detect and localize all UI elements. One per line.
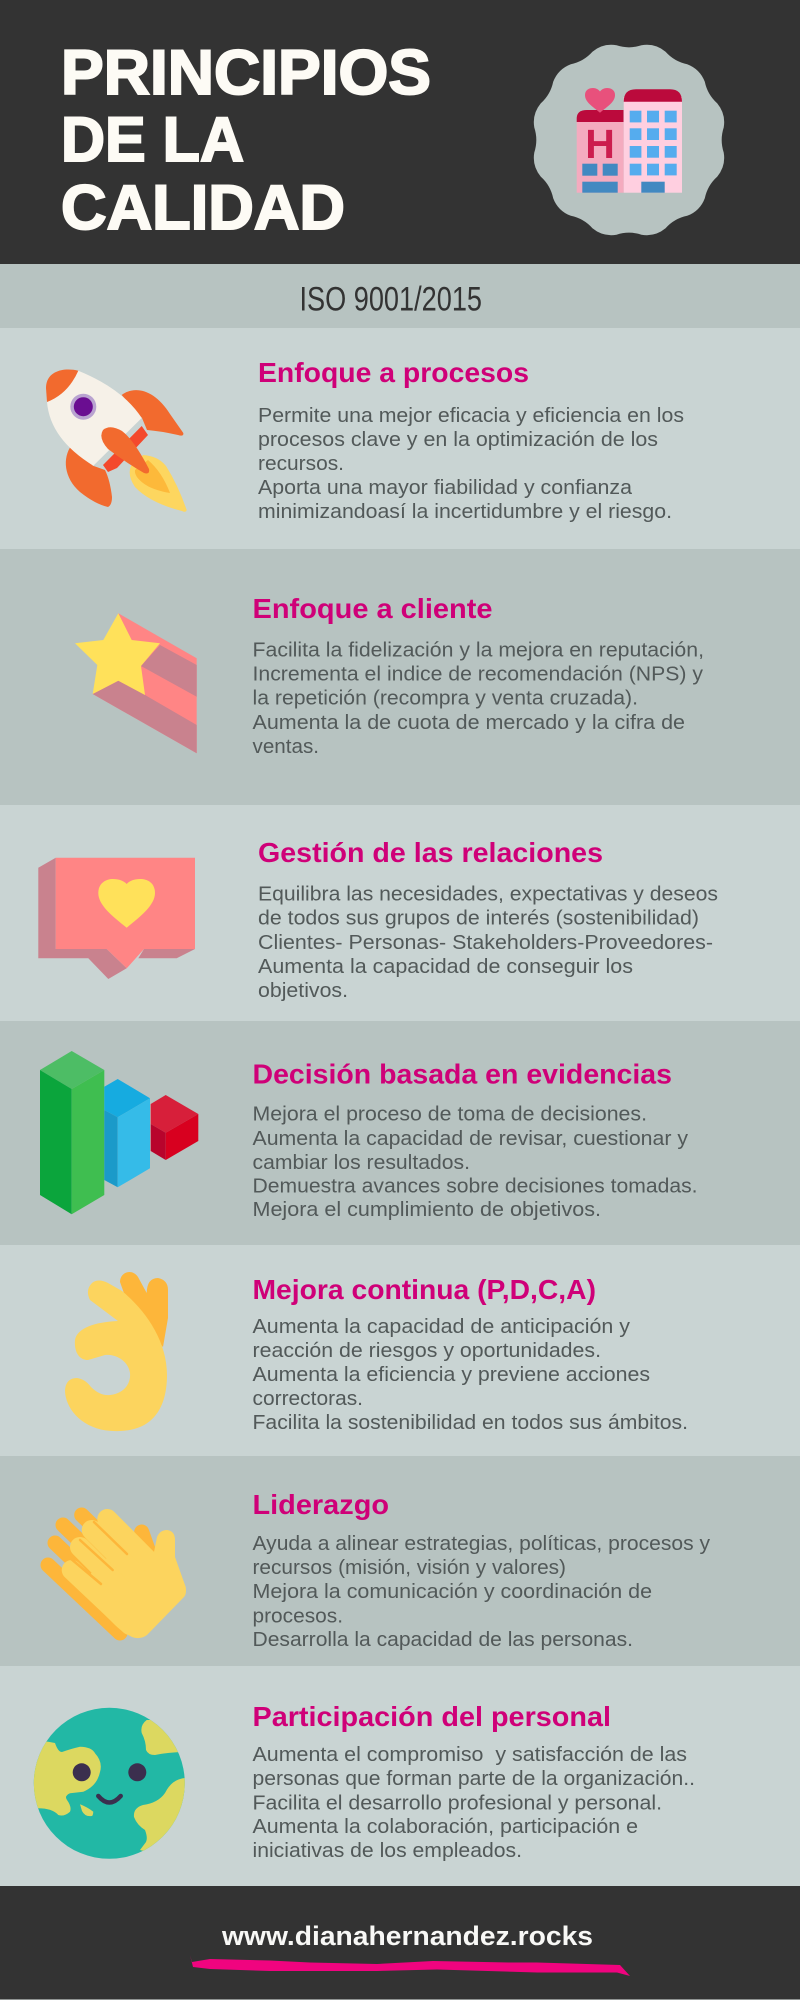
heading: Gestión de las relaciones <box>258 837 603 868</box>
icon: speech bubble with heart <box>38 858 195 979</box>
heading: Decisión basada en evidencias <box>252 1058 672 1090</box>
text block: Equilibra las necesidades, expectativas y deseos <box>258 884 718 906</box>
panel: Enfoque a procesos <box>0 328 800 549</box>
icon: shooting star <box>75 613 197 753</box>
panel: Gestión de las relaciones <box>0 805 800 1021</box>
heading: Enfoque a procesos <box>258 357 529 388</box>
text block: de todos sus grupos de interés (sostenibilidad) <box>258 908 699 930</box>
heading: Participación del personal <box>252 1701 611 1732</box>
text block: personas que forman parte de la organización.. <box>252 1768 695 1790</box>
text block: la repetición (recompra y venta cruzada). <box>252 688 638 710</box>
heading: Liderazgo <box>252 1489 389 1520</box>
icon: OK hand <box>65 1272 168 1431</box>
footer link text: www.dianahernandez.rocks <box>221 1921 593 1951</box>
text block: correctoras. <box>252 1388 363 1410</box>
text block: objetivos. <box>258 980 348 1002</box>
text block: Aumenta la capacidad de conseguir los <box>258 956 633 978</box>
footer panel <box>0 1886 800 2000</box>
text block: procesos clave y en la optimización de los <box>258 429 658 451</box>
subtitle band <box>0 264 800 328</box>
text block <box>252 1533 710 1651</box>
panel: Participación del personal <box>34 1706 694 1861</box>
text block: Aumenta la capacidad de anticipación y <box>252 1316 630 1338</box>
text block: Permite una mejor eficacia y eficiencia en los <box>258 405 684 427</box>
panel: Enfoque a cliente <box>0 549 800 805</box>
text block: Aumenta el compromiso y satisfacción de las <box>252 1744 687 1766</box>
text block <box>258 884 718 1002</box>
text block: Demuestra avances sobre decisiones tomadas. <box>252 1176 698 1198</box>
text block: minimizandoasí la incertidumbre y el riesgo. <box>258 501 672 523</box>
text block <box>252 1744 695 1862</box>
text block: ventas. <box>252 736 319 758</box>
text block: iniciativas de los empleados. <box>252 1840 522 1862</box>
text block <box>252 640 704 758</box>
icon: hotel badge: H <box>585 121 615 167</box>
text block: recursos (misión, visión y valores) <box>252 1557 566 1579</box>
text block: Ayuda a alinear estrategias, políticas, procesos y <box>252 1533 710 1555</box>
brush underline <box>190 1955 630 1976</box>
icon: smiling earth <box>34 1708 185 1859</box>
title: PRINCIPIOS <box>61 38 431 108</box>
text block: Facilita el desarrollo profesional y personal. <box>252 1792 662 1814</box>
header panel <box>0 0 800 264</box>
text block: Aumenta la de cuota de mercado y la cifra de <box>252 712 685 734</box>
text block: recursos. <box>258 453 344 475</box>
text block <box>252 1104 698 1221</box>
text block: Incrementa el indice de recomendación (NPS) y <box>252 664 703 686</box>
icon: 3D bar chart <box>40 1051 198 1214</box>
text block: Clientes- Personas- Stakeholders-Proveedores- <box>258 932 713 954</box>
text block: Desarrolla la capacidad de las personas. <box>252 1629 633 1651</box>
text block: Facilita la sostenibilidad en todos sus ámbitos. <box>252 1412 688 1434</box>
text block: Facilita la fidelización y la mejora en reputación, <box>252 640 704 662</box>
text block: reacción de riesgos y oportunidades. <box>252 1340 601 1362</box>
text block: Mejora la comunicación y coordinación de <box>252 1581 652 1603</box>
icon: hotel badge <box>534 45 724 235</box>
text block: Aumenta la capacidad de revisar, cuestionar y <box>252 1128 688 1150</box>
text block: cambiar los resultados. <box>252 1152 470 1174</box>
text block: Aporta una mayor fiabilidad y confianza <box>258 477 633 499</box>
heading: Enfoque a cliente <box>252 593 492 624</box>
title <box>61 38 431 243</box>
icon: rocket <box>46 370 187 512</box>
text block: Aumenta la colaboración, participación e <box>252 1816 638 1838</box>
subtitle band: ISO 9001/2015 <box>300 280 482 318</box>
text block <box>258 405 684 523</box>
title: CALIDAD <box>61 173 345 243</box>
text block: procesos. <box>252 1606 343 1628</box>
panel: Mejora continua <box>0 1245 800 1456</box>
title: DE LA <box>61 105 244 175</box>
text block <box>252 1316 688 1434</box>
text block: Mejora el cumplimiento de objetivos. <box>252 1199 601 1221</box>
panel: Liderazgo <box>0 1456 800 1666</box>
text block: Aumenta la eficiencia y previene acciones <box>252 1364 650 1386</box>
heading: Mejora continua (P,D,C,A) <box>252 1274 596 1305</box>
panel: Decisión basada en evidencias <box>0 1021 800 1245</box>
icon: clapping hands <box>48 1515 186 1638</box>
text block: Mejora el proceso de toma de decisiones. <box>252 1104 647 1126</box>
